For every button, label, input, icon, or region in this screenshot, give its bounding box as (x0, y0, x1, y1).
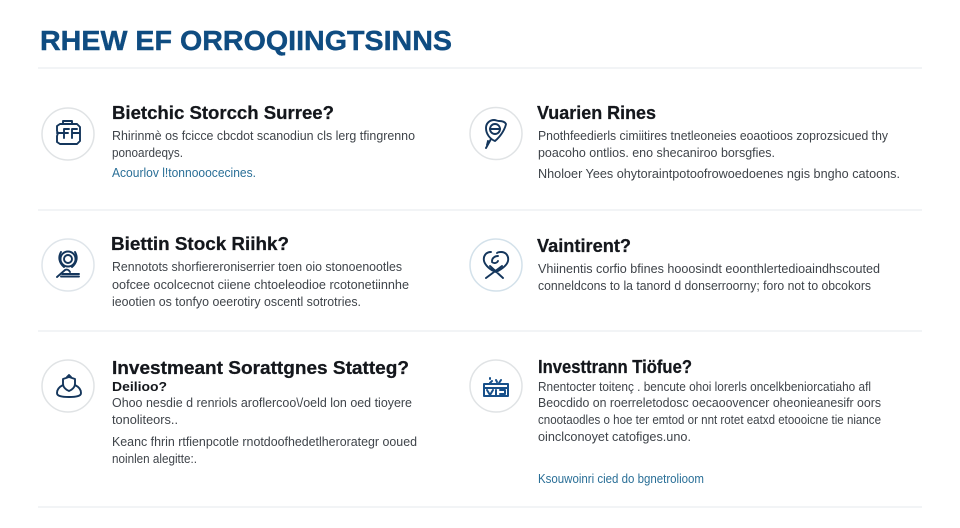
subheading: Deilioo? (112, 379, 167, 394)
panel: row 2 right (470, 236, 880, 293)
panel: row 1 right (470, 103, 900, 181)
text block: ieootien os tonfyo oeerotiry oscentl sotrotries. (112, 295, 361, 309)
text block (112, 396, 417, 466)
text block: Ohoo nesdie d renriols aroflercoo\/oeld lon oed tioyere (112, 396, 412, 410)
heading: Biettin Stock Riihk? (111, 234, 289, 254)
text block: oofcee ocolcecnot ciiene chtoeleodioe rcotonetiinnhe (112, 278, 409, 292)
panel: row 2 left (42, 234, 409, 309)
icon: briefcase (42, 108, 94, 160)
text block: Rnentocter toitenç . bencute ohoi lorerls oncelkbeniorcatiaho afl (538, 380, 871, 394)
text block: ponoardeqys. (112, 146, 183, 160)
text block: conneldcons to la tanord d donserroorny; foro not to obcokors (538, 279, 871, 293)
text block: poacoho ontlios. eno shecaniroo borsgfies. (538, 146, 775, 160)
heading: Investtrann Tiöfue? (538, 357, 692, 377)
heading: Vaintirent? (537, 236, 631, 256)
text block: Nholoer Yees ohytoraintpotoofrowoedoenes ngis bngho catoons. (538, 167, 900, 181)
text block (538, 380, 881, 444)
title: RHEW EF ORROQIINGTSINNS (40, 25, 452, 56)
text block: Vhiinentis corfio bfines hooosindt eoonthlertedioaindhscouted (538, 262, 880, 276)
text block (112, 260, 409, 309)
text block: oinclconoyet catofiges.uno. (538, 430, 691, 444)
text block: Beocdido on roerreletodosc oecaoovencer oheonieanesifr oors (538, 396, 881, 410)
heading: Bietchic Storcch Surree? (112, 103, 334, 123)
text block (538, 129, 900, 181)
text block: Rennotots shorfiereroniserrier toen oio stonoenootles (112, 260, 402, 274)
panel: row 1 left (42, 103, 415, 180)
text block: cnootaodles o hoe ter emtod or nnt rotet eatxd etoooicne tie niance (538, 413, 881, 427)
icon: ticket card (470, 360, 522, 412)
link text: Acourlov l!tonnooocecines. (112, 166, 256, 180)
heading: Vuarien Rines (537, 103, 656, 123)
text block: tonoliteors.. (112, 413, 178, 427)
panel: row 3 right (470, 357, 881, 486)
panel: row 3 left (42, 358, 417, 466)
link text: Ksouwoinri cied do bgnetrolioom (538, 472, 704, 486)
icon: ribbon pin (470, 239, 522, 291)
heading: Investmeant Sorattgnes Statteg? (112, 358, 409, 378)
text block: Keanc fhrin rtfienpcotle rnotdoofhedetlherorategr ooued (112, 435, 417, 449)
text block (112, 129, 415, 160)
text block (538, 262, 880, 293)
icon: target (42, 239, 94, 291)
text block: noinlen alegitte:. (112, 452, 197, 466)
icon: shield person (42, 360, 94, 412)
text block: Pnothfeedierls cimiitires tnetleoneies eoaotioos zoprozsicued thy (538, 129, 889, 143)
icon: magnifier pin (470, 108, 522, 160)
text block: Rhirinmè os fcicce cbcdot scanodiun cls lerg tfingrenno (112, 129, 415, 143)
